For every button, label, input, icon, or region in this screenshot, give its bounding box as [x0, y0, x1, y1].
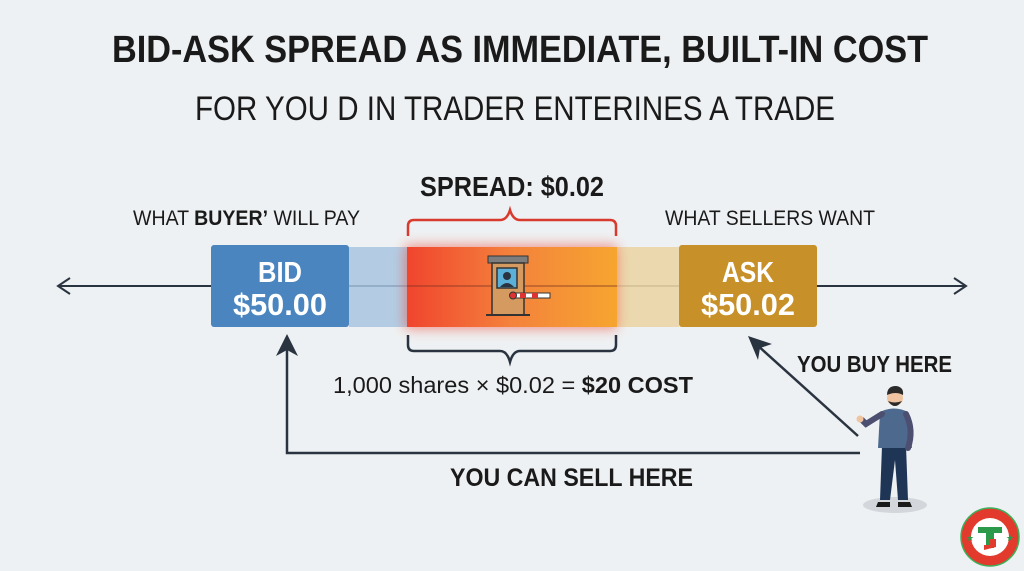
tan band — [617, 247, 679, 327]
price line with arrows — [58, 278, 966, 294]
bid box: BID — [258, 257, 302, 289]
bottom brace — [408, 335, 616, 362]
ask box: $50.02 — [701, 287, 795, 322]
title: BID-ASK SPREAD AS IMMEDIATE, BUILT-IN COST — [112, 29, 928, 71]
logo: ★ — [966, 533, 974, 543]
buy label: YOU BUY HERE — [797, 351, 952, 377]
arrow: sell path — [287, 340, 860, 453]
logo — [961, 508, 1019, 566]
bid box — [211, 245, 349, 327]
sell label: YOU CAN SELL HERE — [450, 464, 693, 492]
buyer label: WHAT BUYER’ WILL PAY — [133, 207, 360, 230]
cost calculation: 1,000 shares × $0.02 = $20 COST — [333, 372, 693, 398]
icon: person — [856, 386, 927, 513]
arrow: buy — [748, 336, 858, 436]
seller label: WHAT SELLERS WANT — [665, 207, 875, 230]
ask box — [679, 245, 817, 327]
subtitle: FOR YOU D IN TRADER ENTERINES A TRADE — [195, 90, 835, 128]
red brace top — [408, 210, 616, 236]
spread label: SPREAD: $0.02 — [420, 171, 604, 202]
bid box: $50.00 — [233, 287, 327, 322]
ask box: ASK — [722, 257, 774, 289]
light blue band — [349, 247, 407, 327]
logo: ★ — [1006, 533, 1014, 543]
icon: toll booth — [486, 256, 550, 315]
spread zone — [405, 245, 617, 329]
